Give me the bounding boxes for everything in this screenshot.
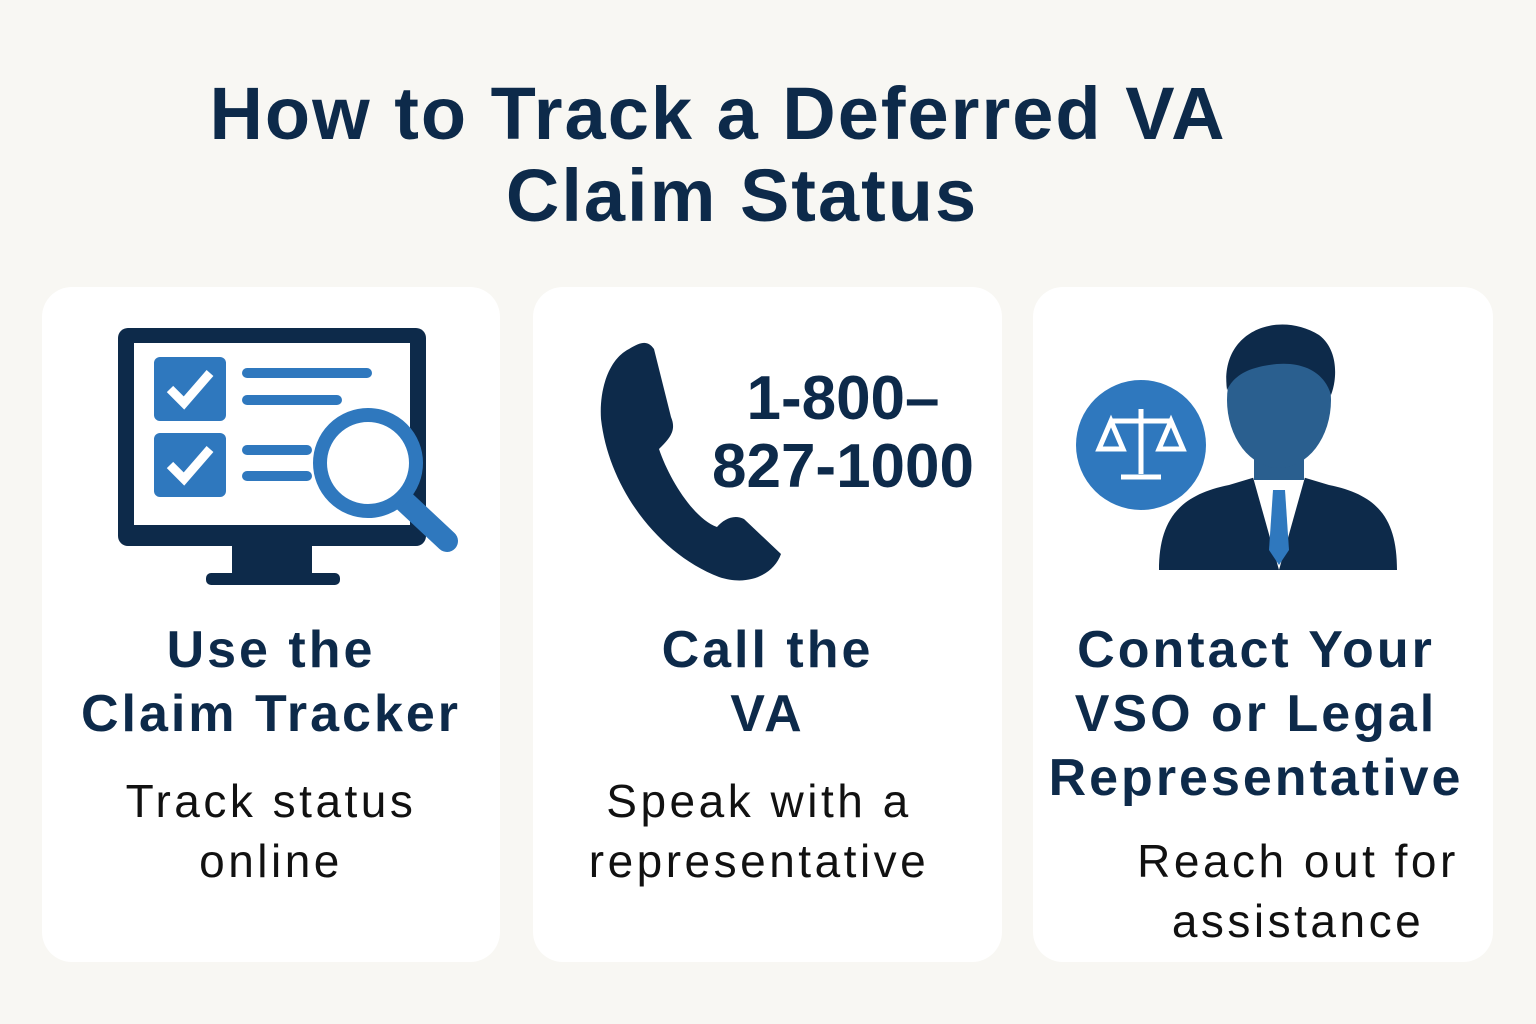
icon: scales badge bbox=[1076, 380, 1206, 510]
phone number: 827-1000 bbox=[712, 432, 974, 501]
heading: Claim Tracker bbox=[81, 685, 461, 743]
heading: Use the bbox=[167, 621, 375, 679]
phone number: 1-800– bbox=[746, 364, 940, 433]
icon: person in suit bbox=[1159, 324, 1397, 570]
heading: VA bbox=[730, 685, 805, 743]
icon: monitor with checklist and magnifier bbox=[118, 328, 458, 585]
subtext: representative bbox=[589, 835, 929, 887]
subtext: Track status bbox=[126, 775, 416, 827]
title line 2: Claim Status bbox=[506, 154, 978, 237]
heading bbox=[1049, 621, 1463, 807]
heading: Contact Your bbox=[1077, 621, 1435, 679]
subtext: online bbox=[199, 835, 343, 887]
subtext: assistance bbox=[1172, 895, 1424, 947]
title: How to Track a Deferred VA bbox=[209, 72, 1227, 155]
heading: VSO or Legal bbox=[1075, 685, 1437, 743]
panel: VSO or legal representative bbox=[1033, 287, 1493, 962]
subtext: Speak with a bbox=[606, 775, 912, 827]
heading: Representative bbox=[1049, 749, 1463, 807]
phone number bbox=[712, 364, 974, 501]
icon: phone bbox=[600, 342, 781, 580]
subtext bbox=[1137, 835, 1459, 947]
panel: claim tracker bbox=[42, 287, 500, 962]
heading: Call the bbox=[662, 621, 873, 679]
heading bbox=[662, 621, 873, 743]
subtext bbox=[126, 775, 416, 887]
panel: call the VA bbox=[533, 287, 1002, 962]
subtext bbox=[589, 775, 929, 887]
heading bbox=[81, 621, 461, 743]
subtext: Reach out for bbox=[1137, 835, 1459, 887]
